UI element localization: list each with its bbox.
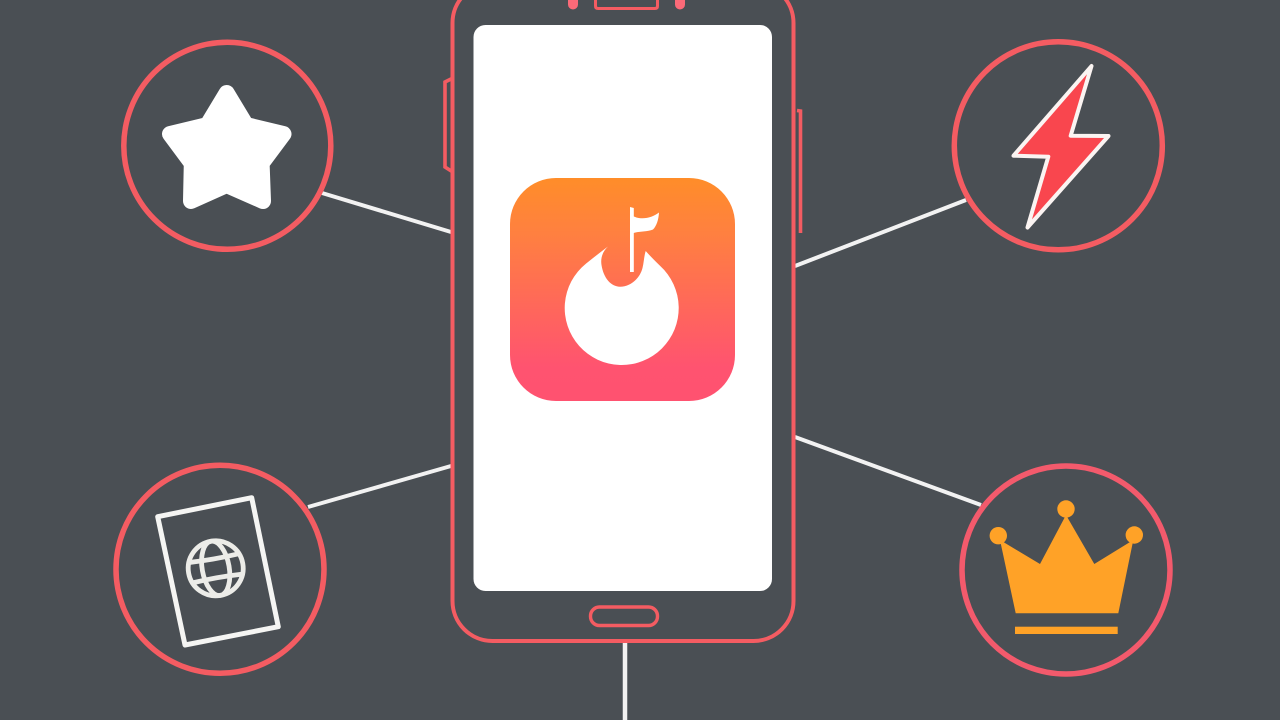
app icon tile	[510, 178, 735, 401]
icon: star	[170, 93, 284, 201]
icon: passport cover	[158, 498, 278, 645]
right side button	[797, 110, 800, 233]
feature: lightning	[954, 42, 1162, 250]
ring	[116, 465, 324, 673]
camera dot right	[675, 0, 685, 10]
icon: lightning bolt	[1014, 66, 1108, 228]
camera dot left	[568, 0, 578, 10]
icon: crown	[990, 500, 1143, 634]
home button	[590, 607, 658, 626]
phone body outline	[452, 0, 794, 641]
feature: star	[124, 42, 331, 249]
ring	[954, 42, 1162, 250]
connector lines	[308, 193, 981, 720]
left side button	[445, 78, 452, 172]
ring	[124, 42, 331, 249]
feature: crown	[962, 466, 1170, 674]
feature: passport	[116, 465, 324, 673]
screen	[474, 25, 772, 591]
phone	[445, 0, 800, 641]
icon: globe	[184, 536, 248, 600]
flag	[630, 207, 659, 272]
app icon	[510, 178, 735, 401]
speaker	[596, 0, 658, 8]
fruit shape	[565, 246, 679, 365]
ring	[962, 466, 1170, 674]
